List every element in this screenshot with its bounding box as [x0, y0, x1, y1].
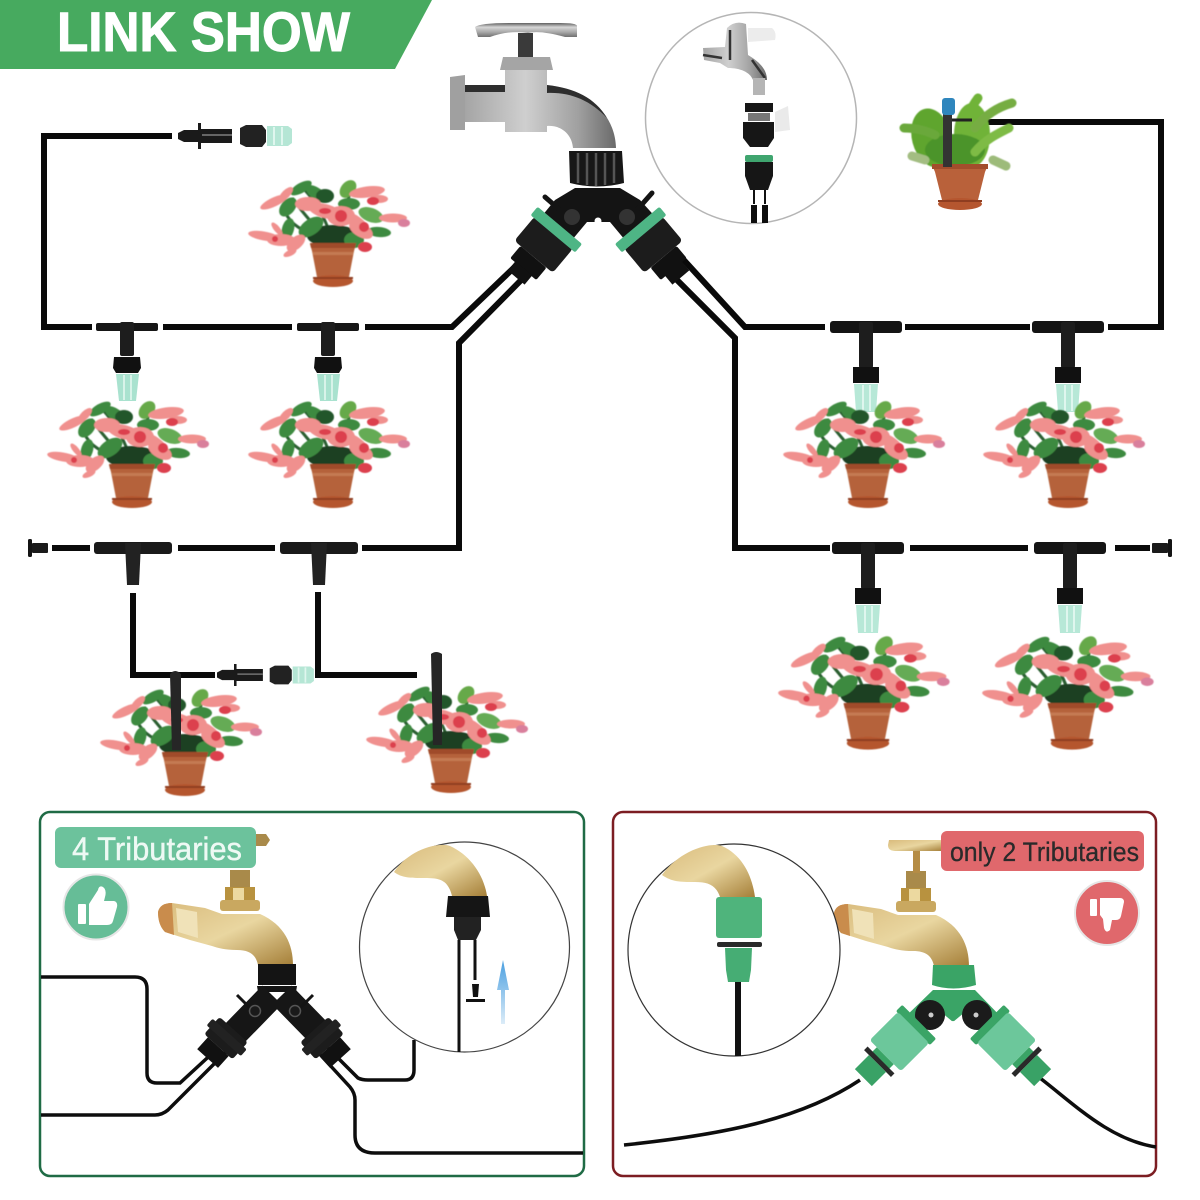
title banner [0, 0, 432, 69]
label: 4 Tributaries: 4 Tributaries [72, 831, 242, 867]
brass faucet knob [256, 834, 270, 846]
inset circle: adapter detail [360, 842, 570, 1052]
fern plant with dripper [904, 98, 1012, 210]
flower pot: bottom left [99, 686, 262, 796]
tee with nozzle: top left 1 [96, 322, 158, 401]
flower pot: row 2 right [981, 633, 1154, 750]
wiring: two tubes [624, 1078, 1156, 1147]
tee with nozzle: lower right 1 [832, 542, 904, 633]
panel: correct setup, 4 tributaries [40, 812, 584, 1176]
icon: thumbs down [1075, 881, 1139, 945]
label: only 2 Tributaries [941, 831, 1144, 871]
flower pot: bottom second [365, 683, 528, 793]
tee with nozzle: top left 2 [297, 322, 359, 401]
irrigation tubing network [44, 122, 1161, 675]
panel: inferior setup, only 2 tributaries [613, 812, 1156, 1176]
icon: thumbs up [64, 874, 128, 940]
flower pot: row 1 left [46, 398, 209, 508]
brass faucet [158, 870, 293, 965]
plain tee: lower left 1 [94, 542, 172, 585]
dripper stake: bottom second [431, 652, 442, 745]
inset circle: faucet and adapter assembly [646, 12, 856, 224]
wiring: four tubes [41, 977, 583, 1153]
flower pot: row 1 third [782, 398, 945, 508]
main silver faucet [450, 23, 624, 186]
Y splitter with two valves [494, 188, 703, 296]
flower pot: row 2 third [777, 633, 950, 750]
blue arrow [497, 960, 509, 1024]
brass faucet [834, 871, 969, 966]
inline connector: top left [178, 123, 292, 149]
black splitter [191, 964, 357, 1074]
tee with nozzle: lower right 2 [1034, 542, 1106, 633]
label: only 2 Tributaries: only 2 Tributaries [950, 837, 1139, 867]
end cap right [1152, 539, 1172, 557]
plain tee: lower left 2 [280, 542, 358, 585]
inline connector: bottom [217, 664, 314, 686]
inset circle: green connector detail [628, 844, 840, 1056]
tee with nozzle: top right 1 [830, 321, 902, 412]
flower pot: row 1 right [982, 398, 1145, 508]
flower pot: row 1 second [247, 398, 410, 508]
brass faucet handle [888, 840, 943, 873]
end cap left [28, 539, 48, 557]
dripper stake: bottom left [170, 671, 181, 750]
tee with nozzle: top right 2 [1032, 321, 1104, 412]
flower pot: top left [247, 177, 410, 287]
title banner: LINK SHOW [57, 0, 350, 63]
green splitter [846, 965, 1060, 1095]
